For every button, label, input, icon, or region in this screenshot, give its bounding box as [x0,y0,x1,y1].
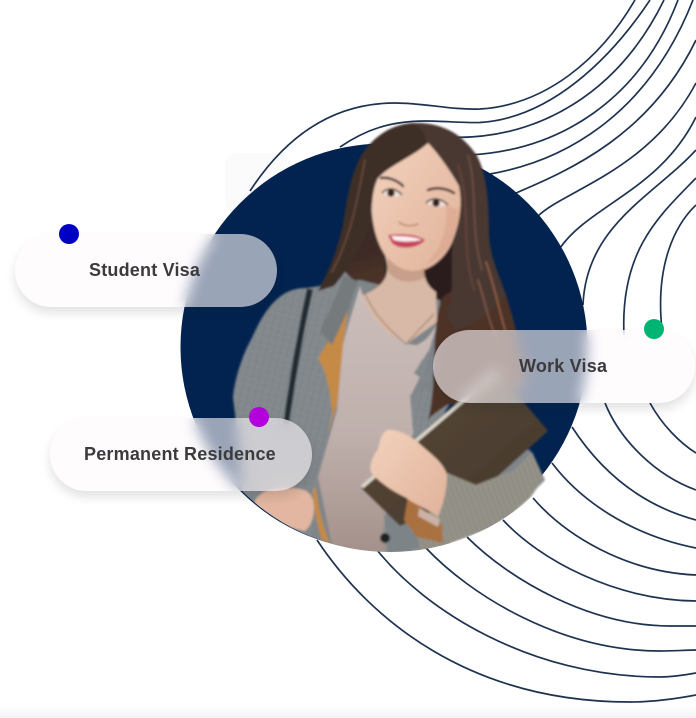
front hair right [413,123,506,330]
necklace [364,290,434,344]
floor shading [0,706,696,718]
hair front over jacket [428,288,527,420]
pill: Work Visa [433,330,695,403]
book page edge [362,371,498,487]
dot: green [644,319,664,339]
pill: Student Visa [15,234,277,307]
right jacket body [382,513,450,552]
cuff shirt band [418,508,440,527]
shirt [318,286,439,556]
neck shadow [387,258,425,282]
right lapel [409,350,450,432]
orange lapel lining [317,310,349,431]
front hair left [318,123,427,291]
torso underlay [308,278,546,550]
faint background card [225,153,291,213]
face [371,143,461,272]
dot: blue [59,224,79,244]
illustration: lines, circle and student photo [178,0,696,703]
curved contour lines: upper [250,0,696,335]
jacket collar [320,275,358,345]
hand holding book [370,430,447,517]
label: Work Visa: Work Visa [519,356,607,376]
dot: purple [249,407,269,427]
student photo illustration [233,123,548,558]
curved contour lines: lower [317,403,696,702]
left brow [381,178,403,186]
pill: Permanent Residence [50,418,312,491]
right brow [428,188,454,193]
cuff [404,497,443,543]
left hand [254,488,314,531]
jacket button [380,533,390,543]
dark hair behind neck [384,245,453,302]
label: Student Visa: Student Visa [89,260,200,280]
book [360,388,548,526]
nose [399,222,418,226]
left eye [382,189,402,197]
label: Permanent Residence: Permanent Residence [84,444,276,464]
mouth [388,234,425,248]
backpack strap [286,289,310,425]
navy circle [180,144,588,550]
left jacket [234,271,352,408]
jacket lower front [383,512,420,552]
right eye [426,199,448,207]
jacket placket [313,487,330,543]
back hair [322,123,515,327]
cheek shading [429,206,458,262]
neck and chest [363,255,437,345]
sleeve [436,452,544,545]
hair strands [332,155,505,345]
